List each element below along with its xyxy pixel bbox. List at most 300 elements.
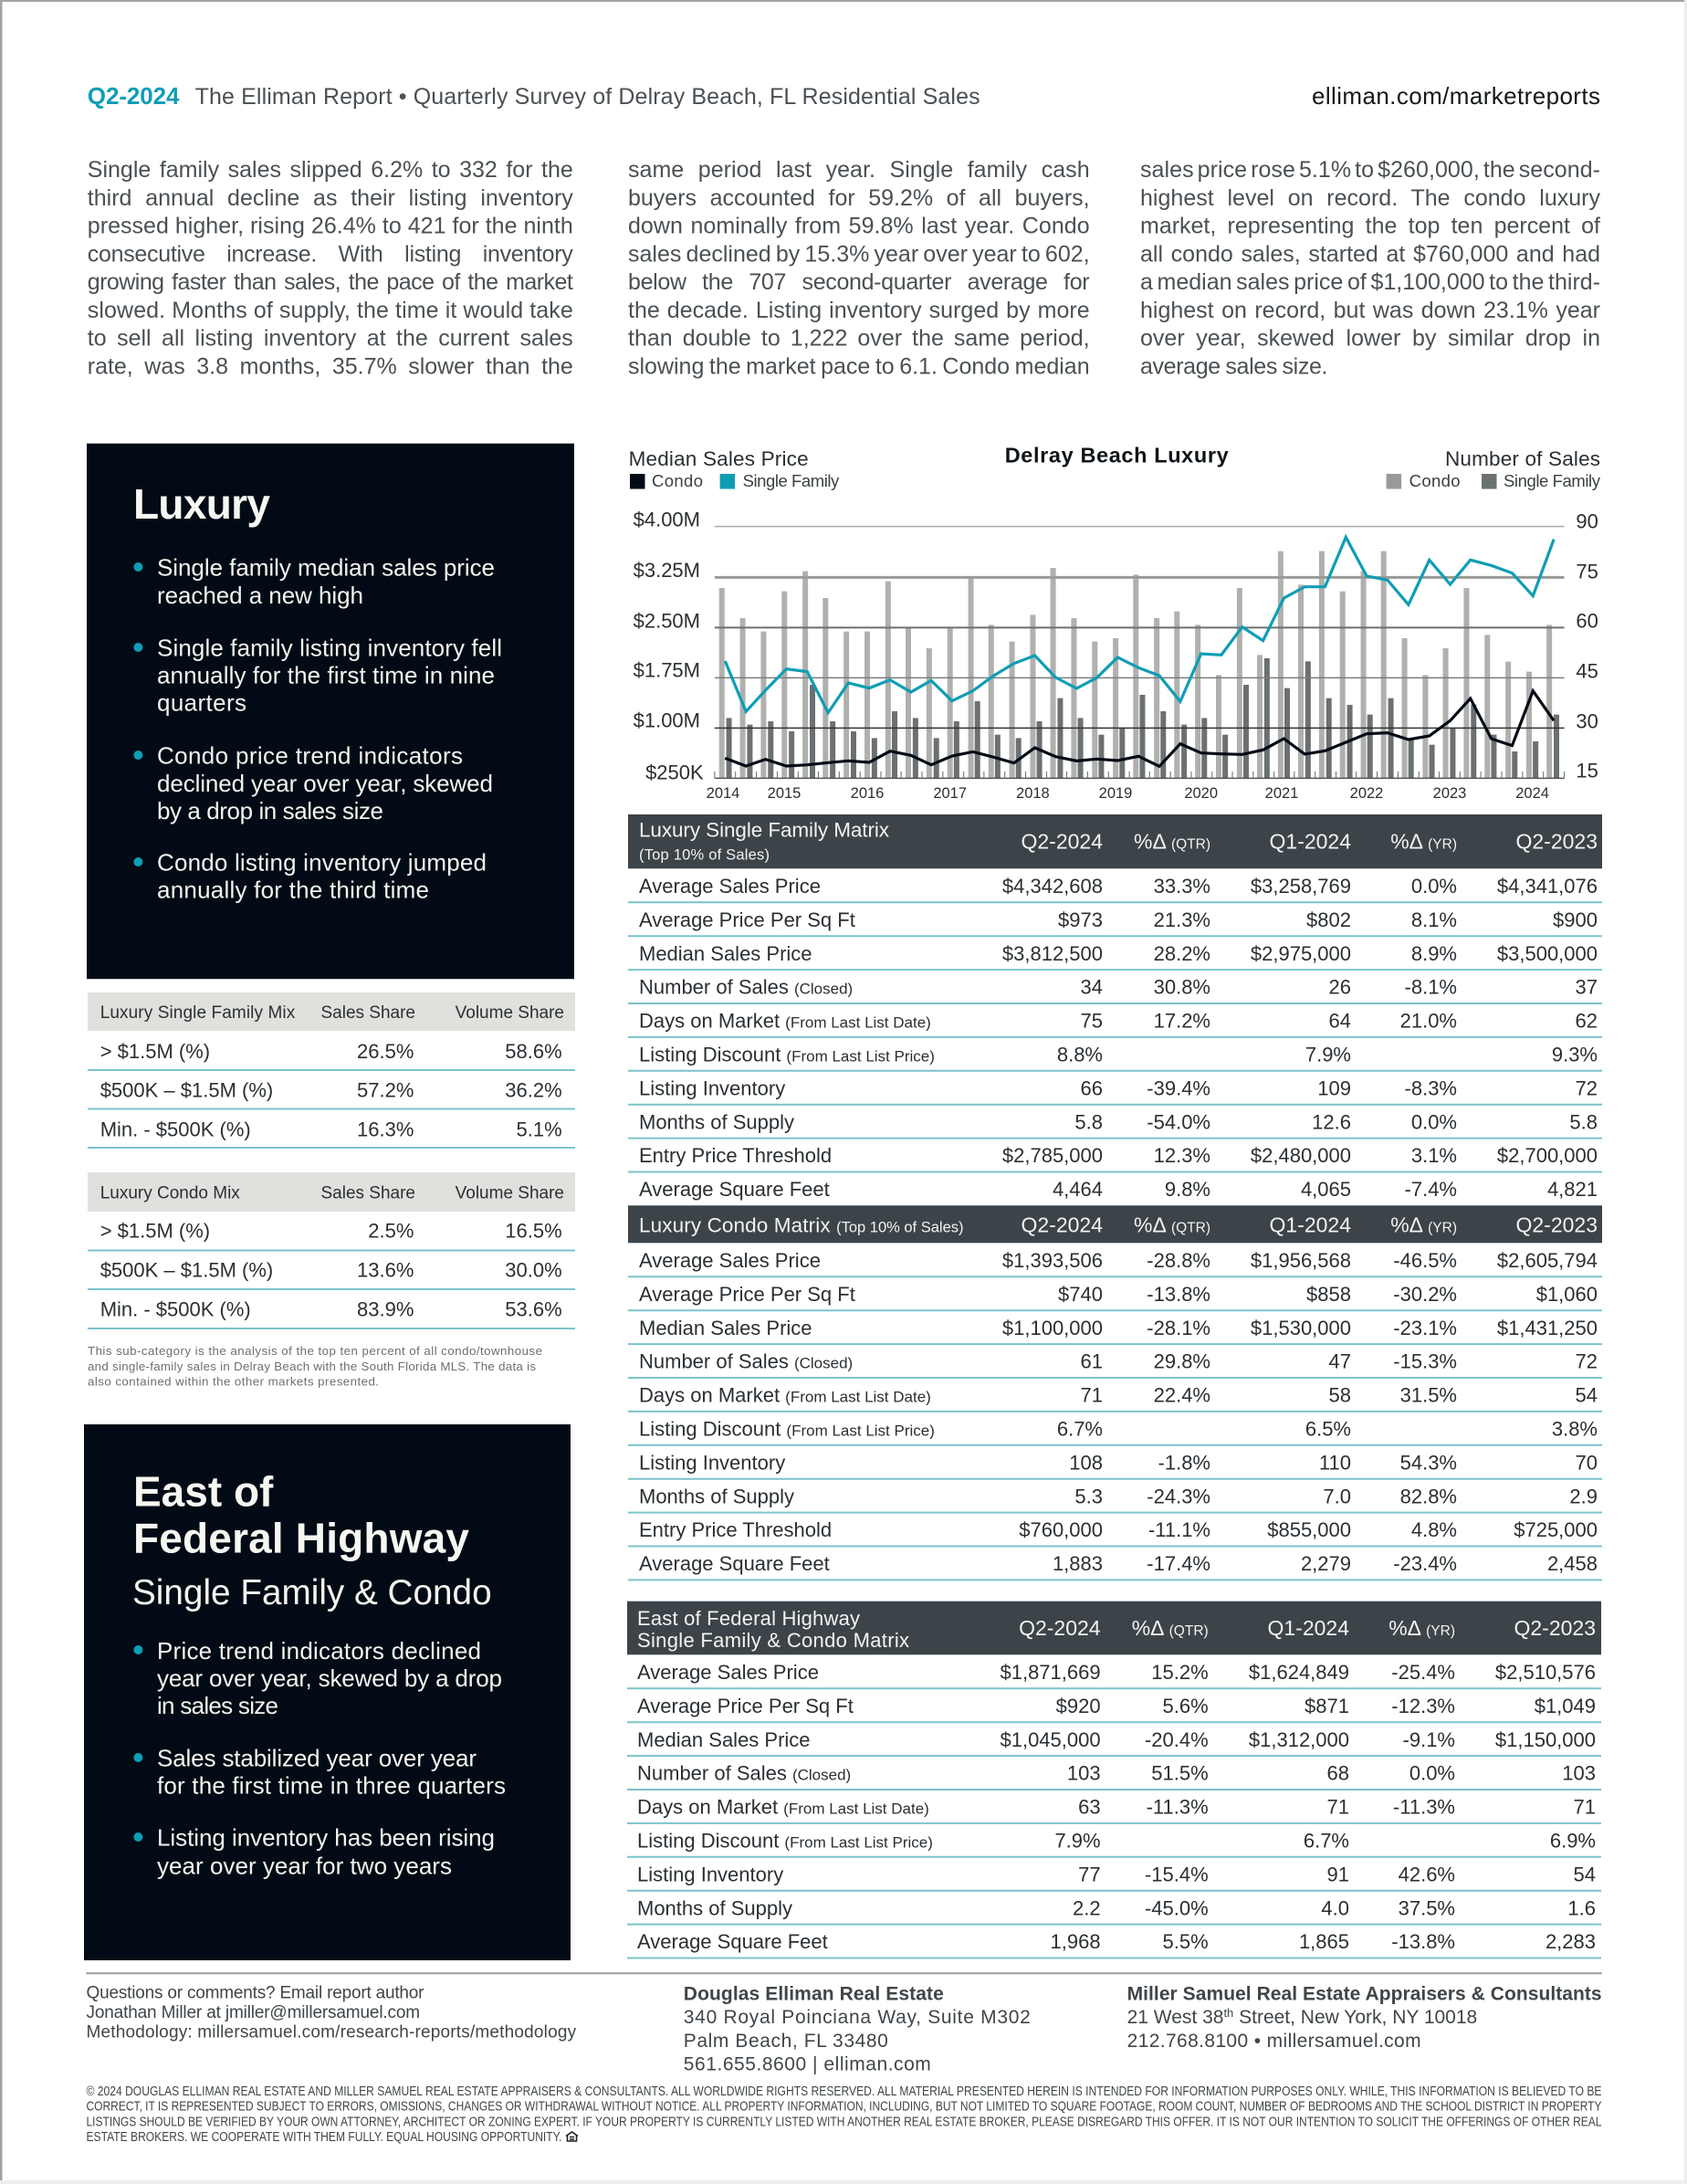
row: Listing Discount xyxy=(628,1417,1602,1445)
row: Months of Supply: 5.3 xyxy=(1074,1485,1103,1507)
intro text column 1: third annual decline as their listing inventory xyxy=(88,185,573,211)
row: Average Sales Price: $3,258,769 xyxy=(1251,875,1351,898)
row: Entry Price Threshold: $2,480,000 xyxy=(1251,1144,1351,1167)
mix row: 16.3% xyxy=(357,1118,414,1140)
table: Luxury Condo Matrix xyxy=(628,1205,1602,1580)
row: Average Sales Price: $4,341,076 xyxy=(1497,875,1598,898)
year axis labels: 2017 xyxy=(933,785,967,802)
row: Listing Inventory: 110 xyxy=(1319,1451,1351,1474)
row: Number of Sales xyxy=(627,1762,1601,1790)
footer: Miller Samuel address: th xyxy=(1223,2006,1233,2020)
row: Average Square Feet: 2,283 xyxy=(1546,1930,1596,1953)
row: Average Price Per Sq Ft: -13.8% xyxy=(1147,1283,1210,1306)
footer: Douglas Elliman address xyxy=(684,1984,1031,2074)
line: single family median price xyxy=(725,537,1554,713)
row: Listing Discount xyxy=(627,1830,1601,1857)
mix row: 53.6% xyxy=(505,1298,562,1321)
row: Months of Supply: 5.8 xyxy=(1074,1110,1103,1133)
intro text column 3 xyxy=(1140,157,1601,379)
matrix header xyxy=(628,814,1602,868)
year axis labels: 2015 xyxy=(768,785,801,802)
row: Entry Price Threshold: -11.1% xyxy=(1148,1518,1210,1541)
row: Entry Price Threshold xyxy=(628,1144,1602,1172)
row: Number of Sales: 47 xyxy=(1329,1350,1351,1373)
row: Average Price Per Sq Ft: Average Price Per Sq Ft xyxy=(639,1283,855,1306)
matrix header: Q2-2024 xyxy=(1021,829,1103,853)
row: Number of Sales: Number of Sales (Closed) xyxy=(637,1762,851,1785)
year axis labels: 2016 xyxy=(851,785,884,802)
row: Average Sales Price: $1,393,506 xyxy=(1002,1249,1103,1272)
matrix header: Q1-2024 xyxy=(1269,829,1351,853)
mix header xyxy=(100,1003,564,1023)
row: Median Sales Price: -23.1% xyxy=(1393,1317,1457,1339)
footer: Miller Samuel address: 21 West 38 xyxy=(1127,2007,1223,2028)
row: Average Sales Price: $2,510,576 xyxy=(1495,1661,1596,1684)
year axis labels: 2023 xyxy=(1433,785,1466,802)
mix row: 58.6% xyxy=(505,1040,562,1063)
row: Days on Market: 22.4% xyxy=(1154,1384,1210,1407)
row: Entry Price Threshold: 4.8% xyxy=(1411,1518,1457,1541)
mix header xyxy=(100,1183,564,1202)
row: Number of Sales: -8.1% xyxy=(1405,976,1457,999)
row: Average Sales Price: $1,871,669 xyxy=(1000,1661,1101,1684)
right axis labels: 90 xyxy=(1576,509,1598,532)
row: Number of Sales: 29.8% xyxy=(1154,1350,1210,1373)
row: Number of Sales xyxy=(628,976,1602,1003)
row: Entry Price Threshold xyxy=(628,1518,1602,1547)
row: Number of Sales: 30.8% xyxy=(1154,976,1210,999)
row: Days on Market: 58 xyxy=(1329,1384,1351,1407)
row: Months of Supply: 5.8 xyxy=(1569,1110,1598,1133)
panel heading: East of Federal Highway xyxy=(133,1467,469,1562)
row: Average Square Feet: 4,065 xyxy=(1301,1178,1351,1201)
row: Entry Price Threshold: Entry Price Threshold xyxy=(639,1144,832,1167)
mix row: 83.9% xyxy=(357,1298,414,1321)
row: Listing Discount: 7.9% xyxy=(1305,1043,1351,1066)
chart left title: Median Sales Price xyxy=(629,447,809,470)
row: Listing Inventory: 42.6% xyxy=(1399,1863,1455,1885)
row: Days on Market: -11.3% xyxy=(1393,1796,1455,1819)
mix row: > $1.5M (%) xyxy=(100,1040,210,1063)
matrix header xyxy=(627,1601,1601,1654)
header line xyxy=(88,82,1600,110)
row: Median Sales Price: Median Sales Price xyxy=(637,1728,811,1751)
row: Median Sales Price: $1,530,000 xyxy=(1251,1317,1351,1339)
report quarter: Q2-2024 xyxy=(88,82,180,110)
panel: Luxury xyxy=(87,444,574,979)
report title: The Elliman Report • Quarterly Survey of Delray Beach, FL Residential Sales xyxy=(195,84,980,110)
row: Median Sales Price: 28.2% xyxy=(1154,942,1210,965)
bullet: price trend: year over year, skewed by a drop xyxy=(157,1664,502,1692)
bullet: listing inventory fell: quarters xyxy=(157,689,246,717)
row: Average Square Feet: Average Square Feet xyxy=(639,1178,830,1201)
panel heading: East of Federal Highway: East of xyxy=(133,1467,274,1515)
bullet: price trend: in sales size xyxy=(157,1692,278,1719)
chart: Delray Beach Luxury xyxy=(629,444,1601,802)
year axis labels: 2019 xyxy=(1099,785,1132,802)
bullet: listing inventory rising xyxy=(133,1823,495,1879)
row: Number of Sales: 0.0% xyxy=(1409,1762,1455,1785)
mix row xyxy=(88,1040,575,1070)
row: Number of Sales: 37 xyxy=(1576,976,1598,999)
row: Months of Supply: Months of Supply xyxy=(639,1485,794,1507)
matrix header: Q2-2024 xyxy=(1019,1616,1101,1640)
bullet: sales stabilized: Sales stabilized year over year xyxy=(157,1745,477,1772)
mix row xyxy=(88,1079,575,1108)
row: Days on Market: 63 xyxy=(1078,1796,1101,1819)
row: Listing Inventory: 109 xyxy=(1317,1076,1351,1099)
row: Days on Market: 75 xyxy=(1081,1010,1103,1033)
intro text column 1: growing faster than sales, the pace of the market xyxy=(88,269,573,295)
footer: Douglas Elliman address: 561.655.8600 | elliman.com xyxy=(684,2053,931,2074)
row: Entry Price Threshold: $855,000 xyxy=(1267,1518,1351,1541)
row: Number of Sales: 26 xyxy=(1329,976,1351,999)
mix header: Sales Share xyxy=(320,1183,415,1202)
row: Months of Supply: Months of Supply xyxy=(637,1896,792,1919)
intro text column 3: highest on record, but was down 23.1% year xyxy=(1140,298,1600,323)
bullet: listing inventory fell xyxy=(133,635,502,717)
footnote xyxy=(88,1344,542,1388)
row: Average Price Per Sq Ft: $871 xyxy=(1305,1695,1349,1717)
mix header: Volume Share xyxy=(456,1003,564,1023)
footer: Miller Samuel address: 212.768.8100 • millersamuel.com xyxy=(1127,2031,1421,2052)
row: Average Sales Price: -28.8% xyxy=(1147,1249,1210,1272)
row: Months of Supply: Months of Supply xyxy=(639,1110,794,1133)
bullet: condo price trend: declined year over year, skewed xyxy=(157,770,493,797)
row: Months of Supply: 37.5% xyxy=(1399,1896,1455,1919)
row: Average Price Per Sq Ft: -30.2% xyxy=(1393,1283,1457,1306)
row: Listing Inventory: -39.4% xyxy=(1147,1076,1210,1099)
intro text column 1 xyxy=(88,157,573,379)
row: Months of Supply xyxy=(628,1110,1602,1139)
row: Days on Market: 71 xyxy=(1574,1796,1596,1819)
matrix header: Q2-2023 xyxy=(1515,829,1598,853)
row: Average Square Feet: 5.5% xyxy=(1163,1930,1209,1953)
row: Days on Market: 71 xyxy=(1081,1384,1103,1407)
mix row: $500K – $1.5M (%) xyxy=(100,1258,273,1281)
row: Listing Discount xyxy=(628,1043,1602,1071)
row: Months of Supply: 12.6 xyxy=(1312,1110,1351,1133)
row: Entry Price Threshold: $760,000 xyxy=(1019,1518,1103,1541)
row: Average Sales Price: 15.2% xyxy=(1151,1661,1209,1684)
row: Listing Inventory: 54 xyxy=(1574,1863,1596,1885)
intro text column 1: consecutive increase. With listing inventory xyxy=(88,241,573,267)
row: Days on Market: 64 xyxy=(1329,1010,1351,1033)
right axis labels: 60 xyxy=(1576,609,1598,632)
row: Average Square Feet: Average Square Feet xyxy=(637,1930,828,1953)
row: Average Price Per Sq Ft: $1,049 xyxy=(1535,1695,1596,1717)
intro text column 2: slowing the market pace to 6.1. Condo median xyxy=(628,353,1090,379)
row: Days on Market xyxy=(628,1384,1602,1412)
mix row xyxy=(88,1258,575,1289)
intro text column 2: down nominally from 59.8% last year. Condo xyxy=(628,214,1090,239)
bars: single family number of sales xyxy=(729,658,1556,778)
left axis labels xyxy=(634,509,704,783)
mix row: 16.5% xyxy=(505,1220,562,1243)
row: Days on Market: Days on Market (From Last List Date) xyxy=(637,1796,929,1819)
row: Average Sales Price: $1,624,849 xyxy=(1249,1661,1349,1684)
mix row: 36.2% xyxy=(505,1079,562,1102)
row: Listing Inventory: -1.8% xyxy=(1158,1451,1210,1474)
row: Number of Sales: 72 xyxy=(1576,1350,1598,1373)
row: Average Sales Price xyxy=(628,1249,1602,1276)
row: Average Price Per Sq Ft: $973 xyxy=(1058,908,1103,931)
mix row: Min. - $500K (%) xyxy=(100,1118,251,1140)
row: Number of Sales: 61 xyxy=(1081,1350,1103,1373)
legend: line series: Single Family xyxy=(743,471,840,490)
intro text column 1: pressed higher, rising 26.4% to 421 for the ninth xyxy=(88,214,573,239)
matrix header: %Δ (YR) xyxy=(1388,1616,1455,1640)
left axis labels: $2.50M xyxy=(634,609,700,632)
row: Listing Inventory: -8.3% xyxy=(1405,1076,1457,1099)
mix row: Min. - $500K (%) xyxy=(100,1298,251,1321)
table: Luxury Single Family Matrix xyxy=(628,814,1602,1201)
bars: condo number of sales xyxy=(722,551,1549,778)
row: Months of Supply: 82.8% xyxy=(1400,1485,1457,1507)
mix row: > $1.5M (%) xyxy=(100,1220,210,1243)
row: Listing Inventory: Listing Inventory xyxy=(639,1451,785,1474)
bullet: condo price trend xyxy=(133,741,493,824)
matrix header: %Δ (QTR) xyxy=(1132,1616,1209,1640)
mix header: Luxury Single Family Mix xyxy=(100,1003,296,1023)
left axis labels: $4.00M xyxy=(634,509,700,531)
panel subheading: Single Family & Condo xyxy=(132,1573,492,1612)
mix row xyxy=(88,1220,575,1251)
bullet: new high xyxy=(133,554,495,609)
mix row: 57.2% xyxy=(357,1079,414,1102)
row: Months of Supply: -24.3% xyxy=(1147,1485,1210,1507)
row: Median Sales Price: $3,812,500 xyxy=(1002,942,1103,965)
row: Days on Market: 17.2% xyxy=(1154,1010,1210,1033)
intro text column 3: average sales size. xyxy=(1140,353,1327,379)
chart right title: Number of Sales xyxy=(1445,447,1600,470)
footer: Douglas Elliman address: Palm Beach, FL 33480 xyxy=(684,2031,888,2052)
row: Listing Discount: 7.9% xyxy=(1054,1830,1101,1852)
row: Listing Discount: 3.8% xyxy=(1552,1417,1598,1441)
icon: equal housing xyxy=(566,2132,578,2141)
row: Average Price Per Sq Ft: Average Price Per Sq Ft xyxy=(639,908,855,931)
table: Luxury Single Family Mix xyxy=(88,992,575,1148)
legend: bar series: Condo xyxy=(1409,471,1461,490)
row: Listing Inventory: 77 xyxy=(1078,1863,1101,1885)
row: Listing Inventory: 70 xyxy=(1576,1451,1598,1474)
row: Number of Sales: 51.5% xyxy=(1151,1762,1209,1785)
plot area xyxy=(715,527,1565,778)
row: Average Sales Price: $2,605,794 xyxy=(1497,1249,1598,1272)
right axis labels xyxy=(1576,509,1598,782)
mix row: 26.5% xyxy=(357,1040,414,1063)
year axis labels: 2018 xyxy=(1016,785,1050,802)
row: Average Price Per Sq Ft: $858 xyxy=(1306,1283,1351,1306)
left axis labels: $1.75M xyxy=(634,659,700,682)
matrix header: Single Family & Condo Matrix xyxy=(637,1629,909,1652)
intro text column 1: slowed. Months of supply, the time it would take xyxy=(88,298,573,323)
row: Median Sales Price: $3,500,000 xyxy=(1497,942,1598,965)
row: Average Sales Price: -46.5% xyxy=(1393,1249,1457,1272)
intro text column 2: the decade. Listing inventory surged by more xyxy=(628,298,1090,323)
legend: bar series: Single Family xyxy=(1504,471,1601,490)
matrix header: Q2-2024 xyxy=(1021,1213,1103,1236)
row: Average Sales Price: Average Sales Price xyxy=(639,875,821,898)
intro text column 1: to sell all listing inventory at the current sales xyxy=(88,325,573,351)
website: elliman.com/marketreports xyxy=(1312,82,1600,110)
line: condo median price xyxy=(725,691,1554,766)
row: Average Square Feet: -17.4% xyxy=(1147,1552,1210,1575)
row: Average Sales Price: 33.3% xyxy=(1154,875,1210,898)
row: Average Square Feet: 1,968 xyxy=(1051,1930,1101,1953)
row: Median Sales Price xyxy=(628,1317,1602,1344)
row: Months of Supply: -45.0% xyxy=(1145,1896,1209,1919)
intro text column 3: over year, skewed lower by similar drop in xyxy=(1140,325,1600,351)
bullet: price trend: Price trend indicators declined xyxy=(157,1637,481,1664)
bullet: condo listing inventory: annually for the third time xyxy=(157,877,429,904)
bullet: new high: reached a new high xyxy=(157,582,363,609)
matrix header: East of Federal Highway xyxy=(637,1607,860,1630)
row: Average Price Per Sq Ft: $1,060 xyxy=(1536,1283,1598,1306)
row: Number of Sales: 103 xyxy=(1067,1762,1101,1785)
row: Listing Inventory: Listing Inventory xyxy=(639,1076,785,1099)
row: Average Square Feet: 2,458 xyxy=(1547,1552,1598,1575)
row: Days on Market: -11.3% xyxy=(1147,1796,1209,1819)
row: Average Price Per Sq Ft: $900 xyxy=(1553,908,1598,931)
footer: contact questions: Questions or comments? Email report author xyxy=(86,1983,424,2002)
legend: bar series xyxy=(1387,471,1601,490)
table: East of Federal Highway Matrix xyxy=(627,1601,1601,1958)
row: Average Square Feet: 4,464 xyxy=(1053,1178,1103,1201)
row: Median Sales Price: -9.1% xyxy=(1403,1728,1455,1751)
row: Median Sales Price: -28.1% xyxy=(1147,1317,1210,1339)
footer: contact questions xyxy=(86,1983,577,2042)
row: Average Square Feet: Average Square Feet xyxy=(639,1552,830,1575)
mix row: $500K – $1.5M (%) xyxy=(100,1079,273,1102)
row: Entry Price Threshold: Entry Price Threshold xyxy=(639,1518,832,1541)
row: Listing Inventory xyxy=(628,1076,1602,1105)
bullet: price trend xyxy=(133,1637,502,1719)
row: Days on Market: 71 xyxy=(1327,1796,1349,1819)
left axis labels: $250K xyxy=(645,761,704,783)
row: Median Sales Price: $1,045,000 xyxy=(1000,1728,1101,1751)
row: Median Sales Price: Median Sales Price xyxy=(639,942,812,965)
row: Number of Sales xyxy=(628,1350,1602,1378)
row: Listing Inventory xyxy=(628,1451,1602,1479)
bullet: condo price trend: by a drop in sales size xyxy=(157,797,383,824)
mix row xyxy=(88,1118,575,1148)
row: Median Sales Price: 8.9% xyxy=(1411,942,1457,965)
row: Days on Market: 31.5% xyxy=(1400,1384,1457,1407)
matrix header: Q2-2023 xyxy=(1515,1213,1598,1236)
row: Median Sales Price: $1,312,000 xyxy=(1249,1728,1349,1751)
intro text column 3: a median sales price of $1,100,000 to the third- xyxy=(1140,269,1600,295)
row: Average Sales Price: -25.4% xyxy=(1391,1661,1455,1684)
intro text column 2 xyxy=(628,157,1090,379)
matrix header: Q1-2024 xyxy=(1269,1213,1351,1236)
row: Median Sales Price: $1,100,000 xyxy=(1002,1317,1103,1339)
bullet: listing inventory fell: Single family listing inventory fell xyxy=(157,635,502,662)
right axis labels: 15 xyxy=(1576,760,1598,782)
intro text column 2: same period last year. Single family cash xyxy=(628,157,1090,183)
row: Number of Sales: -15.3% xyxy=(1393,1350,1457,1373)
intro text column 3: market, representing the top ten percent of xyxy=(1140,214,1600,239)
row: Days on Market: 62 xyxy=(1576,1010,1598,1033)
row: Median Sales Price xyxy=(627,1728,1601,1756)
legend: line series xyxy=(630,471,840,490)
panel heading: East of Federal Highway: Federal Highway xyxy=(133,1515,469,1562)
row: Average Price Per Sq Ft xyxy=(627,1695,1601,1722)
row: Average Sales Price xyxy=(628,875,1602,902)
mix row: 5.1% xyxy=(517,1118,562,1140)
panel: East of Federal Highway xyxy=(84,1424,571,1960)
row: Entry Price Threshold: 12.3% xyxy=(1154,1144,1210,1167)
bullet: condo listing inventory xyxy=(133,849,487,904)
row: Months of Supply: 2.2 xyxy=(1073,1896,1101,1919)
footer: contact questions: Methodology: millersamuel.com/research-reports/methodology xyxy=(86,2023,577,2042)
right axis labels: 30 xyxy=(1576,709,1598,732)
footnote: and single-family sales in Delray Beach with the South Florida MLS. The data is xyxy=(88,1360,536,1373)
bullet: listing inventory rising: Listing inventory has been rising xyxy=(157,1823,495,1851)
row: Average Price Per Sq Ft: $920 xyxy=(1056,1695,1101,1717)
year axis labels: 2014 xyxy=(707,785,739,802)
row: Listing Discount: 6.9% xyxy=(1550,1830,1596,1852)
row: Listing Inventory: 54.3% xyxy=(1400,1451,1457,1474)
row: Listing Inventory: -15.4% xyxy=(1145,1863,1209,1885)
row: Listing Inventory: 72 xyxy=(1576,1076,1598,1099)
row: Average Square Feet: 1,865 xyxy=(1299,1930,1349,1953)
row: Listing Discount: 6.7% xyxy=(1304,1830,1349,1852)
row: Days on Market xyxy=(628,1010,1602,1037)
row: Median Sales Price: Median Sales Price xyxy=(639,1317,812,1339)
row: Average Sales Price: 0.0% xyxy=(1411,875,1457,898)
row: Average Square Feet xyxy=(627,1930,1601,1958)
mix row xyxy=(88,1298,575,1328)
row: Number of Sales: 68 xyxy=(1327,1762,1349,1785)
row: Average Price Per Sq Ft: $802 xyxy=(1306,908,1351,931)
intro text column 3: highest level on record. The condo luxury xyxy=(1140,185,1601,211)
year axis labels: 2021 xyxy=(1265,785,1298,802)
row: Number of Sales: 34 xyxy=(1081,976,1103,999)
row: Listing Discount: 6.5% xyxy=(1305,1417,1351,1441)
row: Days on Market: Days on Market (From Last List Date) xyxy=(639,1384,931,1407)
legend: line series: Condo xyxy=(652,471,703,490)
row: Median Sales Price: $1,431,250 xyxy=(1497,1317,1598,1339)
row: Average Sales Price xyxy=(627,1661,1601,1688)
row: Average Square Feet: -7.4% xyxy=(1405,1178,1457,1201)
row: Months of Supply: 2.9 xyxy=(1569,1485,1598,1507)
row: Listing Discount: Listing Discount (From Last List Price) xyxy=(639,1417,935,1441)
row: Median Sales Price: $1,150,000 xyxy=(1495,1728,1596,1751)
row: Listing Discount: 8.8% xyxy=(1057,1043,1103,1066)
footnote: This sub-category is the analysis of the top ten percent of all condo/townhouse xyxy=(88,1344,542,1358)
row: Months of Supply: 1.6 xyxy=(1567,1896,1596,1919)
matrix header: %Δ (QTR) xyxy=(1134,1213,1210,1236)
row: Months of Supply: 0.0% xyxy=(1411,1110,1457,1133)
year axis labels: 2022 xyxy=(1350,785,1383,802)
row: Listing Inventory xyxy=(627,1863,1601,1891)
bullet: sales stabilized: for the first time in three quarters xyxy=(157,1771,506,1799)
row: Listing Inventory: Listing Inventory xyxy=(637,1863,783,1885)
row: Days on Market xyxy=(627,1796,1601,1823)
mix header: Sales Share xyxy=(320,1003,415,1023)
row: Average Sales Price: $1,956,568 xyxy=(1251,1249,1351,1272)
row: Months of Supply: 4.0 xyxy=(1321,1896,1349,1919)
row: Average Price Per Sq Ft: Average Price Per Sq Ft xyxy=(637,1695,854,1717)
row: Months of Supply xyxy=(627,1896,1601,1925)
row: Days on Market: 21.0% xyxy=(1400,1010,1457,1033)
footer: Miller Samuel address xyxy=(1127,1984,1602,2052)
row: Listing Discount: 9.3% xyxy=(1552,1043,1598,1066)
row: Months of Supply xyxy=(628,1485,1602,1513)
row: Average Square Feet: 1,883 xyxy=(1053,1552,1103,1575)
row: Listing Discount: Listing Discount (From Last List Price) xyxy=(639,1043,935,1066)
